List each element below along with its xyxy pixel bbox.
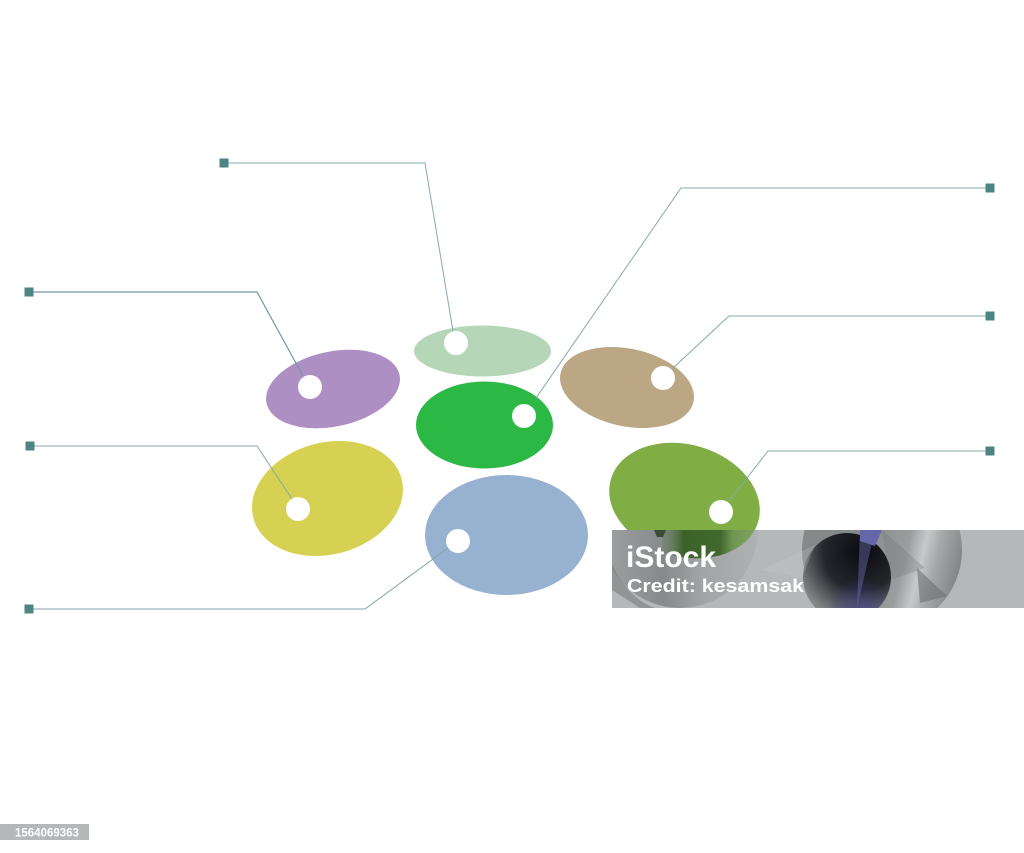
watermark banner (612, 530, 1024, 608)
ellipse: yellow (239, 425, 416, 572)
ellipse: light green (414, 326, 551, 376)
marker: green (986, 184, 994, 192)
leader line: yellow (26, 442, 292, 499)
image id badge: 1564069363 (15, 828, 79, 840)
ellipse: olive (595, 426, 774, 575)
leader line: purple (24, 288, 303, 376)
leader line: blue (24, 548, 448, 614)
watermark: dark triangle facet (917, 568, 947, 603)
watermark: olive ellipse showing through (654, 530, 755, 558)
watermark: dark inner sphere (803, 533, 891, 608)
leader line: light green (220, 158, 453, 331)
watermark: credit: Credit: kesamsak (627, 575, 805, 596)
dot: yellow (286, 497, 310, 521)
watermark: iStock logo: iStock (626, 541, 716, 574)
marker: yellow (26, 442, 34, 450)
marker: tan (986, 312, 994, 320)
dot: tan (651, 366, 675, 390)
ellipse: green (416, 382, 553, 468)
dot: blue (446, 529, 470, 553)
ellipse: tan (552, 335, 702, 440)
dot: purple (298, 375, 322, 399)
marker: olive (986, 446, 994, 456)
leader line: olive (729, 446, 994, 501)
dot: light green (444, 331, 468, 355)
marker: blue (24, 604, 34, 614)
dot: green (512, 404, 536, 428)
ellipse: blue (425, 475, 588, 595)
watermark: right sphere (802, 530, 962, 608)
ellipse: purple (259, 338, 407, 440)
leader line: tan (672, 312, 994, 369)
image id badge (0, 824, 89, 840)
marker: purple (24, 288, 34, 296)
watermark: left sphere (612, 530, 752, 608)
leader line: green (536, 184, 994, 398)
dot: olive (709, 500, 733, 524)
marker: light green (220, 158, 228, 168)
